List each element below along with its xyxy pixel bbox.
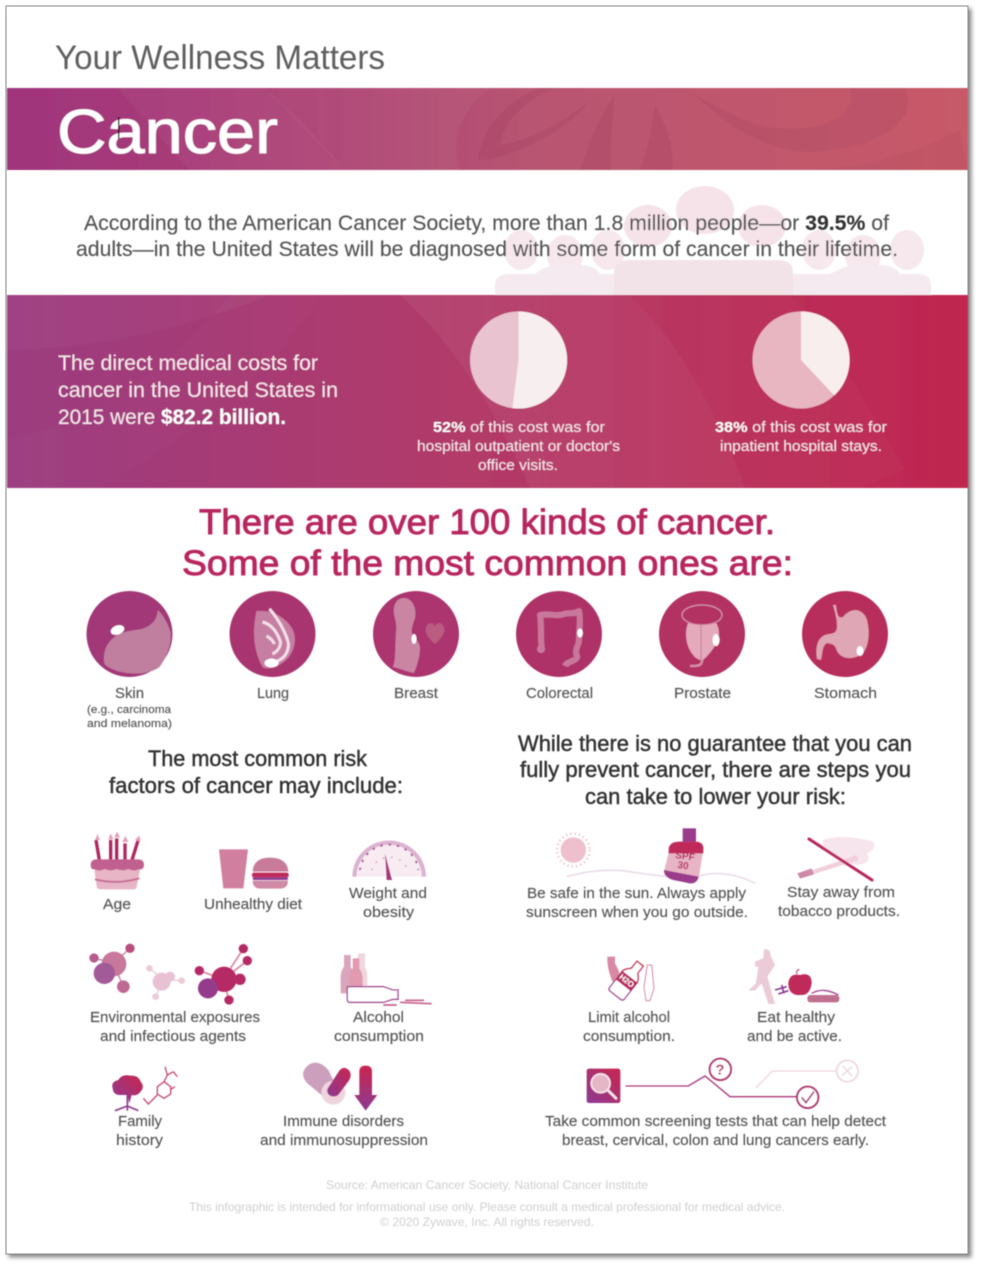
icon: skin xyxy=(86,591,172,677)
caption: 38% xyxy=(715,419,887,455)
organ labels: Prostate xyxy=(674,685,731,702)
heading: kinds of cancer: There are over 100 kinds of cancer. xyxy=(199,503,775,542)
people silhouette background xyxy=(495,186,931,295)
risk factor labels: Family xyxy=(118,1113,162,1130)
icon: breast xyxy=(373,591,459,677)
arrow: down xyxy=(354,1066,377,1111)
icon: check xyxy=(797,1087,818,1108)
cost statement: cancer in the United States in xyxy=(58,379,338,402)
icon: prostate xyxy=(659,591,745,677)
icon: molecules xyxy=(89,944,252,1005)
risk factor labels: Unhealthy diet xyxy=(204,896,303,913)
icon: scale gauge xyxy=(352,841,426,880)
heading: risk factors: factors of cancer may include: xyxy=(109,773,403,798)
caption: 52%: hospital outpatient or doctor's xyxy=(417,438,620,455)
heading: Cancer xyxy=(57,98,278,167)
organ labels: Breast xyxy=(394,685,439,702)
intro paragraph: According to the American Cancer Society, more than 1.8 million people—or 39.5% of xyxy=(84,212,889,235)
icon: sunscreen bottle: 30 xyxy=(677,860,690,872)
icon: sunscreen bottle: SPF xyxy=(675,850,695,864)
organ labels: Colorectal xyxy=(526,685,593,702)
banner: Cancer xyxy=(7,88,968,170)
prevention labels xyxy=(526,884,900,1149)
pie chart: 52% xyxy=(470,311,567,408)
caption: 38%: inpatient hospital stays. xyxy=(720,438,882,455)
icon: colorectal xyxy=(516,591,602,677)
icon: screening magnifier xyxy=(587,1069,620,1103)
risk factor icons xyxy=(89,832,432,1111)
prevention labels: Take common screening tests that can help detect xyxy=(545,1113,887,1130)
pie chart: 38% xyxy=(752,311,850,408)
heading: risk factors: The most common risk xyxy=(148,746,368,771)
heading: risk factors xyxy=(109,746,403,798)
icon: cross xyxy=(837,1060,858,1082)
icon: no tobacco xyxy=(797,837,874,880)
risk factor labels: and infectious agents xyxy=(100,1028,246,1045)
source and disclaimer: This infographic is intended for informational use only. Please consult a medical professional for medical advice. xyxy=(189,1200,785,1214)
caption: 52% xyxy=(417,419,620,474)
icon: heart and pill xyxy=(303,1063,351,1105)
icon: question: ? xyxy=(716,1063,725,1079)
source and disclaimer: Source: American Cancer Society, National Cancer Institute xyxy=(326,1178,648,1192)
cost statement xyxy=(58,352,338,429)
caption: 38%: 38% of this cost was for xyxy=(715,419,887,436)
intro paragraph: adults—in the United States will be diagnosed with some form of cancer in their lifetime. xyxy=(76,238,898,261)
prevention labels: tobacco products. xyxy=(778,903,900,920)
title: Your Wellness Matters: Your Wellness Matters xyxy=(55,39,385,77)
text cursor xyxy=(118,117,120,139)
screening paths xyxy=(626,1076,798,1097)
organ labels: Skin xyxy=(115,685,144,702)
risk factor labels: Age xyxy=(103,896,131,913)
risk factor labels: Environmental exposures xyxy=(90,1009,260,1026)
prevention icons xyxy=(557,828,874,1108)
risk factor labels: and immunosuppression xyxy=(260,1132,428,1149)
icon: drink xyxy=(219,849,248,888)
heading: lower your risk: While there is no guarantee that you can xyxy=(518,731,912,756)
organ labels: and melanoma) xyxy=(87,718,172,730)
icon: burger xyxy=(252,858,289,889)
organ labels: (e.g., carcinoma xyxy=(87,704,172,716)
prevention labels: and be active. xyxy=(747,1028,842,1045)
icon: sun xyxy=(557,834,590,866)
risk factor labels: consumption xyxy=(334,1028,424,1045)
cost statement: The direct medical costs for xyxy=(58,352,318,375)
icon: apple and food xyxy=(775,969,839,1002)
prevention labels: breast, cervical, colon and lung cancers early. xyxy=(562,1132,869,1149)
source and disclaimer: © 2020 Zywave, Inc. All rights reserved. xyxy=(380,1215,594,1229)
risk factor labels: Weight and xyxy=(349,885,427,902)
source and disclaimer xyxy=(189,1178,785,1229)
heading: lower your risk xyxy=(518,731,912,809)
risk factor labels: Alcohol xyxy=(353,1009,404,1026)
icon: question xyxy=(710,1059,731,1080)
prevention labels: Be safe in the sun. Always apply xyxy=(527,885,746,902)
panel: medical costs xyxy=(7,295,968,488)
icon: alcohol bottles xyxy=(341,953,432,1005)
risk factor labels: Immune disorders xyxy=(283,1113,404,1130)
heading: lower your risk: can take to lower your risk: xyxy=(585,784,846,809)
prevention labels: Stay away from xyxy=(787,884,895,901)
heading: lower your risk: fully prevent cancer, there are steps you xyxy=(520,757,911,782)
caption: 52%: 52% of this cost was for xyxy=(433,419,605,436)
icon: stomach xyxy=(802,591,888,677)
caption: 52%: office visits. xyxy=(478,457,558,474)
prevention labels: Eat healthy xyxy=(757,1009,836,1026)
prevention labels: consumption. xyxy=(583,1028,675,1045)
prevention labels: sunscreen when you go outside. xyxy=(526,904,748,921)
icon: limit alcohol xyxy=(607,957,654,1001)
organ labels xyxy=(87,685,877,730)
wave line xyxy=(567,870,755,883)
risk factor labels: obesity xyxy=(363,904,415,921)
intro paragraph xyxy=(76,212,898,261)
icon: sunscreen bottle xyxy=(664,828,703,883)
icon: runner xyxy=(748,949,775,1004)
icon: dna structure xyxy=(143,1067,177,1104)
organ labels: Lung xyxy=(257,685,289,702)
organ labels: Stomach xyxy=(814,685,877,702)
icon: family tree xyxy=(112,1075,143,1111)
cost statement: 2015 were $82.2 billion. xyxy=(58,406,286,429)
risk factor labels xyxy=(90,885,428,1149)
icon: cake xyxy=(91,832,144,889)
icon: lung xyxy=(230,591,316,677)
prevention labels: Limit alcohol xyxy=(588,1009,670,1026)
icon: limit alcohol: H2O xyxy=(617,972,636,990)
risk factor labels: history xyxy=(116,1132,164,1149)
heading: kinds of cancer xyxy=(182,503,793,583)
heading: kinds of cancer: Some of the most common ones are: xyxy=(182,544,793,583)
